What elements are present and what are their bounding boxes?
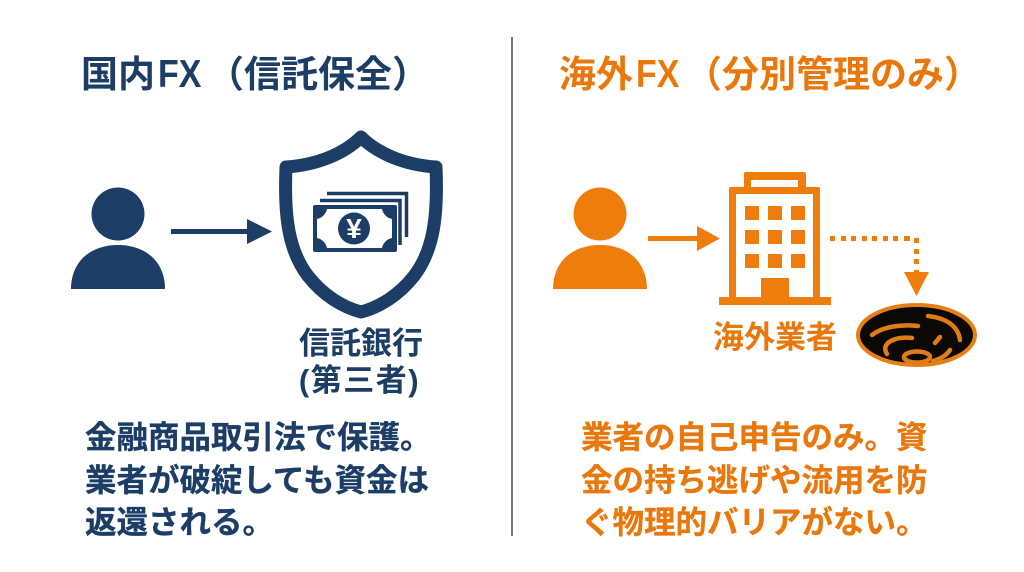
- text: domestic description: 金融商品取引法で保護。: [85, 419, 432, 455]
- text: overseas description: 業者の自己申告のみ。資: [581, 419, 928, 455]
- label: overseas broker: 海外業者: [713, 320, 837, 355]
- icon: shield with yen banknotes: ¥: [346, 213, 362, 244]
- title: overseas FX: FX: [636, 53, 679, 96]
- text: domestic description: 返還される。: [85, 504, 274, 540]
- label: trust bank: 信託銀行: [299, 326, 423, 361]
- text: overseas description: [581, 419, 928, 540]
- title: domestic FX: FX: [158, 53, 201, 96]
- text: domestic description: 業者が破綻しても資金は: [85, 462, 429, 498]
- title: overseas FX: 海外 （分別管理のみ）: [559, 54, 981, 95]
- label: trust bank: [299, 326, 423, 398]
- center divider: [511, 37, 512, 536]
- label: trust bank: (第三者): [299, 363, 420, 398]
- title: domestic FX: 国内 （信託保全）: [81, 54, 429, 95]
- text: domestic description: [85, 419, 432, 540]
- text: overseas description: 金の持ち逃げや流用を防: [581, 462, 928, 498]
- text: overseas description: ぐ物理的バリアがない。: [581, 504, 928, 540]
